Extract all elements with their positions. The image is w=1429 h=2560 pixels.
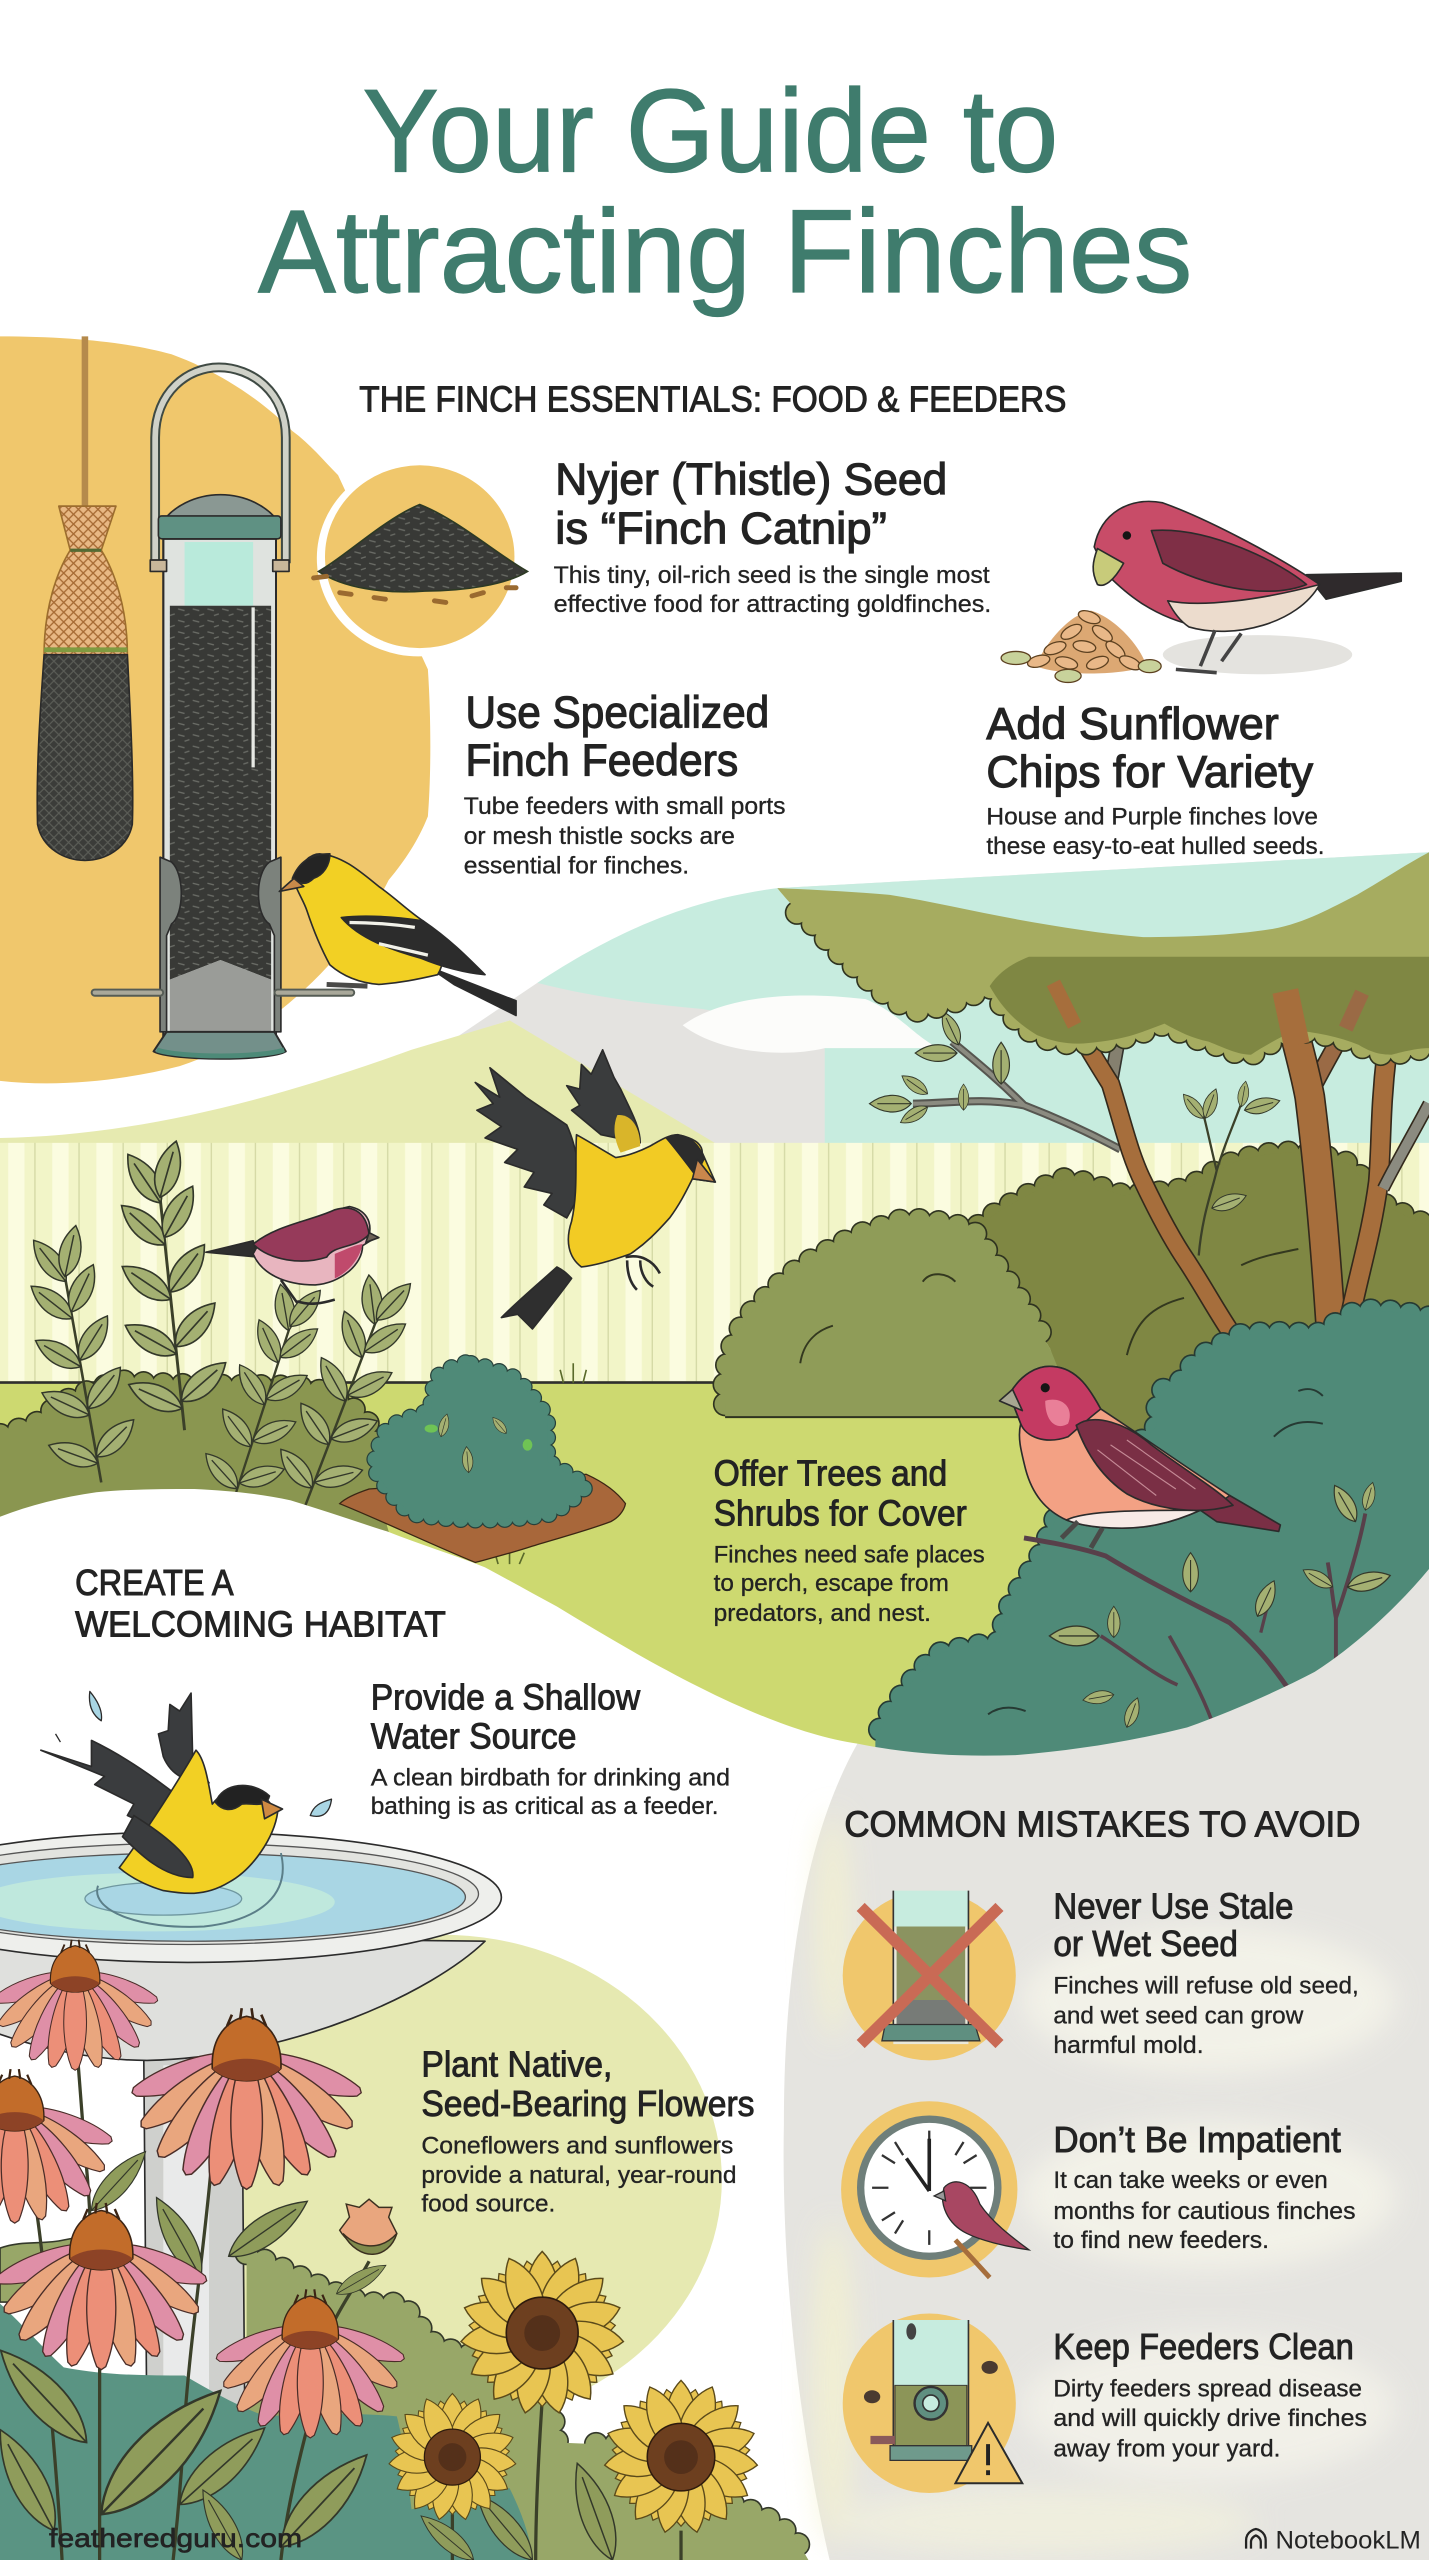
text: plant native: food source. — [421, 2191, 555, 2217]
text: sunflower chips: these easy-to-eat hulled seeds. — [986, 834, 1324, 860]
bird: purple finch with sunflower chips — [1093, 501, 1401, 674]
text: stale seed: and wet seed can grow — [1053, 2004, 1304, 2030]
title: Your Guide to — [363, 65, 1058, 196]
olive bush — [725, 1220, 1078, 1417]
text: sunflower chips: Add Sunflower — [986, 700, 1279, 749]
text: trees and shrubs — [714, 1453, 985, 1627]
flower stems and leaves — [0, 2024, 681, 2560]
pale green wedge — [0, 1020, 720, 1146]
back dark bush — [978, 1153, 1429, 1437]
panel: common mistakes background — [784, 1569, 1429, 2560]
text: impatient: Don’t Be Impatient — [1053, 2119, 1341, 2160]
text: trees and shrubs: Finches need safe places — [714, 1542, 985, 1568]
cloud — [683, 995, 939, 1053]
feeder: tube feeder — [95, 367, 351, 1059]
text: nyjer seed: This tiny, oil-rich seed is the single most — [554, 563, 990, 589]
text: keep clean — [1053, 2326, 1367, 2462]
left garden bush — [0, 1381, 392, 1543]
panel: create a welcoming habitat white wave — [0, 1489, 866, 2560]
shrub — [374, 1363, 586, 1520]
text: water source: bathing is as critical as a feeder. — [371, 1794, 719, 1820]
text: nyjer seed: effective food for attracting goldfinches. — [554, 592, 991, 618]
text: sunflower chips: House and Purple finches love — [986, 804, 1318, 830]
sunflowers — [388, 2251, 759, 2535]
gray hills backdrop — [457, 852, 1429, 1469]
sky — [537, 852, 1429, 1306]
text: plant native: Plant Native, — [421, 2044, 612, 2085]
foreground branches — [1024, 1513, 1365, 1721]
trunk tops over canopy — [1053, 983, 1362, 1045]
text: keep clean: and will quickly drive finches — [1053, 2406, 1367, 2432]
text: plant native: Coneflowers and sunflowers — [421, 2133, 733, 2159]
text: stale seed: or Wet Seed — [1053, 1923, 1238, 1964]
text: impatient — [1053, 2119, 1356, 2254]
text: specialized feeders — [464, 688, 786, 879]
text: trees and shrubs: predators, and nest. — [714, 1601, 931, 1627]
text: plant native: provide a natural, year-round — [421, 2163, 737, 2189]
logo: NotebookLM: NotebookLM — [1275, 2527, 1421, 2555]
text: stale seed — [1053, 1885, 1359, 2059]
text: specialized feeders: Use Specialized — [465, 688, 769, 737]
title: Attracting Finches — [258, 186, 1192, 317]
tree trunks — [913, 962, 1429, 1336]
heading: common mistakes: COMMON MISTAKES TO AVOID — [844, 1804, 1360, 1845]
foreground leaves — [1049, 1481, 1393, 1729]
text: specialized feeders: Tube feeders with small ports — [464, 794, 786, 820]
icon: clock with finch — [841, 2101, 1029, 2278]
heading: create a welcoming habitat — [75, 1562, 446, 1645]
text: sunflower chips — [986, 700, 1324, 860]
watermark: featheredguru.com: featheredguru.com — [49, 2523, 302, 2553]
tree canopy — [777, 852, 1429, 1055]
fence — [0, 1143, 1429, 1383]
title — [258, 65, 1192, 317]
text: water source: Water Source — [371, 1716, 576, 1757]
icon: nyjer seed circle — [314, 460, 528, 656]
text: keep clean: Keep Feeders Clean — [1053, 2326, 1354, 2367]
heading: finch essentials: THE FINCH ESSENTIALS: FOOD & FEEDERS — [359, 378, 1066, 419]
teal bush — [875, 1311, 1429, 1796]
garden bed: olive bushes and teal ground — [0, 2233, 808, 2560]
text: plant native: Seed-Bearing Flowers — [421, 2083, 755, 2124]
birdbath — [0, 1832, 501, 2441]
bird: small purple finch on plant — [206, 1207, 379, 1304]
bird: bathing goldfinch — [41, 1691, 332, 1927]
bird: flying goldfinch — [475, 1050, 715, 1329]
text: specialized feeders: essential for finches. — [464, 853, 689, 879]
text: impatient: months for cautious finches — [1053, 2199, 1356, 2225]
branch leaves and twig — [869, 1009, 1282, 1256]
text: stale seed: harmful mold. — [1053, 2033, 1204, 2059]
panel: flowers pale circle — [160, 1935, 722, 2424]
icon: dirty feeder with warning — [843, 2313, 1022, 2493]
left garden plants — [6, 1133, 438, 1522]
text: trees and shrubs: Shrubs for Cover — [714, 1493, 967, 1534]
text: sunflower chips: Chips for Variety — [986, 748, 1313, 797]
text: trees and shrubs: to perch, escape from — [714, 1571, 949, 1597]
panel: backyard habitat scene — [0, 852, 1429, 1806]
text: specialized feeders: or mesh thistle socks are — [464, 824, 735, 850]
icon: stale seed feeder crossed out — [843, 1891, 1016, 2060]
text: keep clean: away from your yard. — [1053, 2436, 1280, 2462]
coneflowers — [0, 1940, 408, 2438]
bird: large purple finch perched — [999, 1366, 1280, 1548]
icon: sunflower chips pile — [1001, 608, 1161, 682]
text: impatient: to find new feeders. — [1053, 2228, 1269, 2254]
text: impatient: It can take weeks or even — [1053, 2168, 1328, 2194]
lawn — [0, 1381, 1429, 1806]
text: specialized feeders: Finch Feeders — [465, 737, 738, 786]
text: nyjer seed: is “Finch Catnip” — [555, 505, 887, 554]
text: trees and shrubs: Offer Trees and — [714, 1453, 947, 1494]
text: nyjer seed — [554, 456, 991, 618]
heading: create a welcoming habitat: WELCOMING HABITAT — [75, 1604, 446, 1645]
bird: perched goldfinch — [279, 854, 516, 1016]
text: keep clean: Dirty feeders spread disease — [1053, 2377, 1362, 2403]
text: water source — [371, 1676, 730, 1820]
heading: create a welcoming habitat: CREATE A — [75, 1562, 234, 1603]
mulch bed — [340, 1474, 625, 1562]
text: plant native — [421, 2044, 755, 2217]
panel: food and feeders background — [0, 336, 430, 1083]
text: stale seed: Finches will refuse old seed, — [1053, 1973, 1359, 1999]
feeder: mesh thistle sock — [37, 336, 133, 860]
text: stale seed: Never Use Stale — [1053, 1885, 1293, 1926]
text: water source: Provide a Shallow — [371, 1676, 641, 1717]
text: nyjer seed: Nyjer (Thistle) Seed — [555, 456, 947, 505]
grass tufts — [495, 1363, 866, 1564]
text: water source: A clean birdbath for drinking and — [371, 1765, 730, 1791]
